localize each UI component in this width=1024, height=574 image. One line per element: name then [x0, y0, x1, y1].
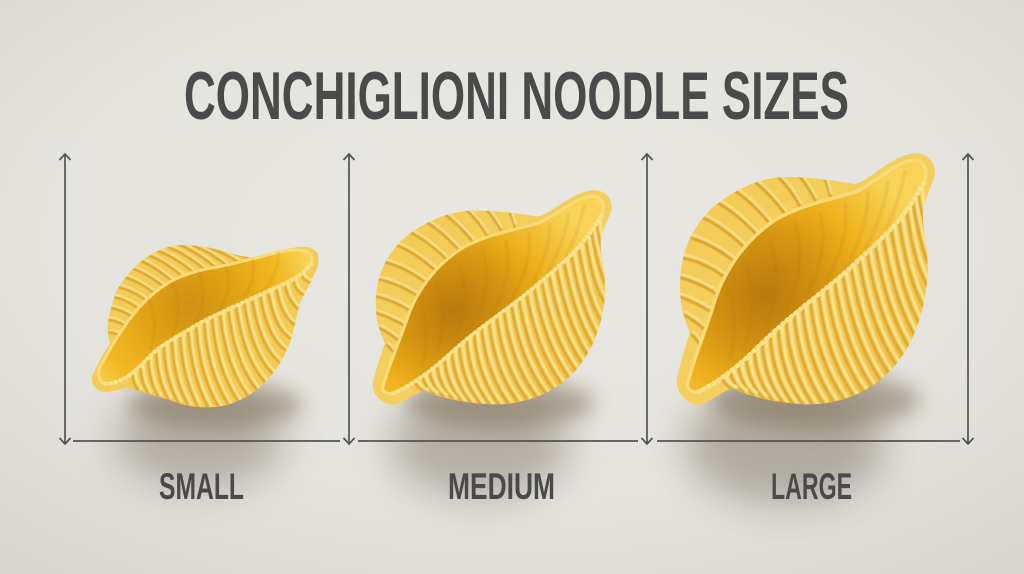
panel: medium shell [358, 154, 652, 507]
small shell wide shadow [115, 392, 285, 488]
label: large: LARGE [771, 466, 852, 507]
panel: large shell [657, 153, 974, 507]
medium shell contact shadow [405, 379, 595, 427]
arrow: medium width line [358, 440, 638, 442]
arrow: medium height [642, 154, 652, 444]
large shell wide shadow [685, 385, 885, 505]
arrow: small height right [344, 154, 354, 444]
arrow: large width line [657, 440, 960, 442]
small shell contact shadow [127, 383, 303, 427]
icon: large conchiglioni shell [677, 153, 935, 405]
label: small: SMALL [159, 466, 244, 507]
icon: small conchiglioni shell [92, 242, 318, 407]
panel: small shell [60, 154, 354, 507]
medium shell wide shadow [390, 391, 570, 499]
large shell contact shadow [710, 372, 920, 428]
arrow: large height [962, 154, 974, 444]
arrow: small width line [73, 440, 340, 442]
label: medium: MEDIUM [448, 466, 555, 507]
icon: medium conchiglioni shell [373, 190, 612, 405]
arrow: small height left [60, 154, 70, 444]
